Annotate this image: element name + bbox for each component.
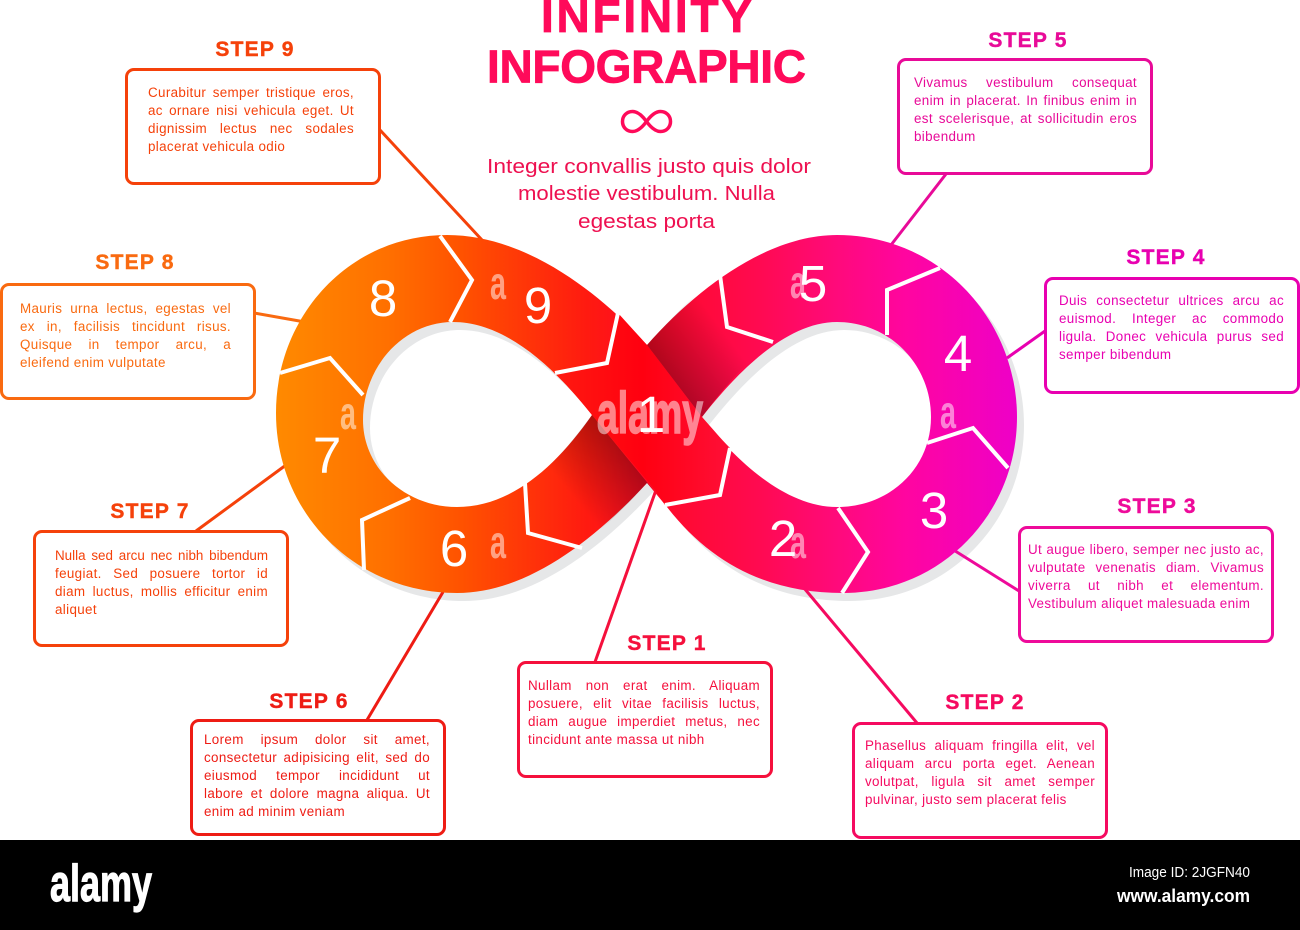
panel: step 5: Vivamus vestibulum consequat <box>914 75 1137 90</box>
subtitle: egestas porta <box>578 211 716 233</box>
panel: step 5: est scelerisque, at sollicitudin eros <box>914 111 1137 126</box>
step numbers: 5 <box>799 255 827 312</box>
panel: step 9 <box>125 38 381 185</box>
step numbers <box>313 255 972 577</box>
panel: step 1: posuere, elit vitae facilisis luctus, <box>528 696 760 711</box>
panel: step 8: Mauris urna lectus, egestas vel <box>20 301 231 316</box>
panel: step 7: diam luctus, mollis efficitur enim <box>55 584 268 599</box>
panel: step 2: Phasellus aliquam fringilla elit, vel <box>865 738 1095 753</box>
subtitle <box>487 156 811 233</box>
watermark marks: a <box>940 386 956 438</box>
footer branding: alamy <box>50 855 152 913</box>
panel: step 6: STEP 6 <box>269 690 349 713</box>
step numbers: 9 <box>524 277 552 334</box>
panel: step 3: Vestibulum aliquet malesuada enim <box>1028 596 1250 611</box>
panel: step 5: STEP 5 <box>988 29 1068 52</box>
panel: step 2: pulvinar, justo sem placerat felis <box>865 792 1067 807</box>
panel: step 3 <box>1018 495 1274 643</box>
panel: step 3: viverra ut nibh et elementum. <box>1028 578 1264 593</box>
panel: step 1 <box>517 632 773 778</box>
panel: step 4: Duis consectetur ultrices arcu ac <box>1059 293 1284 308</box>
panel: step 3: Ut augue libero, semper nec justo ac, <box>1028 542 1264 557</box>
panel: step 3: vulputate venenatis diam. Vivamus <box>1028 560 1264 575</box>
panel: step 7 <box>33 500 289 647</box>
connectors <box>196 130 1045 723</box>
footer bar <box>0 840 1300 930</box>
step numbers: 1 <box>637 386 665 443</box>
panel: step 1: Nullam non erat enim. Aliquam <box>528 678 760 693</box>
watermark marks <box>340 256 956 568</box>
panel: step 2: aliquam arcu porta eget. Aenean <box>865 756 1095 771</box>
panel: step 5 <box>897 29 1153 175</box>
panel: step 4: ligula. Donec vehicula purus sed <box>1059 329 1284 344</box>
watermark marks: alamy <box>597 381 703 446</box>
panel: step 4: euismod. Integer ac commodo <box>1059 311 1284 326</box>
infinity ribbon <box>276 235 1017 593</box>
title <box>487 0 806 92</box>
footer branding: Image ID: 2JGFN40 <box>1129 864 1250 881</box>
panel: step 9: placerat vehicula odio <box>148 139 285 154</box>
panel: step 4: STEP 4 <box>1126 246 1206 269</box>
infinity shadow <box>283 243 1024 601</box>
watermark marks: a <box>490 516 506 568</box>
panel: step 4: semper bibendum <box>1059 347 1171 362</box>
step numbers: 7 <box>313 427 341 484</box>
icon: infinity symbol <box>622 112 670 132</box>
watermark marks: a <box>490 257 506 309</box>
panel: step 6: eiusmod tempor incididunt ut <box>204 768 430 783</box>
subtitle: Integer convallis justo quis dolor <box>487 156 811 178</box>
panel: step 5: bibendum <box>914 129 976 144</box>
step numbers: 4 <box>944 325 972 382</box>
panel: step 9: dignissim lectus nec sodales <box>148 121 354 136</box>
panel: step 3: STEP 3 <box>1117 495 1197 518</box>
panel: step 7: aliquet <box>55 602 97 617</box>
panel: step 8: STEP 8 <box>95 251 175 274</box>
title: INFOGRAPHIC <box>487 40 806 92</box>
footer branding: www.alamy.com <box>1116 886 1250 906</box>
step numbers: 6 <box>440 520 468 577</box>
panel: step 2 <box>852 691 1108 839</box>
panel: step 6: labore et dolore magna aliqua. Ut <box>204 786 430 801</box>
panel: step 1: tincidunt ante massa ut nibh <box>528 732 705 747</box>
panel: step 2: STEP 2 <box>945 691 1025 714</box>
watermark marks: a <box>790 516 806 568</box>
panel: step 7: Nulla sed arcu nec nibh bibendum <box>55 548 268 563</box>
panel: step 7: STEP 7 <box>110 500 190 523</box>
panel: step 8 <box>0 251 256 400</box>
panel: step 5: enim in placerat. In finibus enim in <box>914 93 1137 108</box>
step numbers: 8 <box>369 270 397 327</box>
panel: step 7: feugiat. Sed posuere tortor id <box>55 566 268 581</box>
panel: step 1: diam augue imperdiet metus, nec <box>528 714 760 729</box>
panel: step 4 <box>1044 246 1300 394</box>
under-band shading <box>525 275 773 545</box>
panel: step 2: volutpat, ligula sit amet semper <box>865 774 1095 789</box>
segment separators <box>280 236 1008 593</box>
panel: step 6: Lorem ipsum dolor sit amet, <box>204 732 430 747</box>
panel: step 6 <box>190 690 446 836</box>
step numbers: 3 <box>920 482 948 539</box>
footer branding <box>50 855 1250 913</box>
panel: step 9: ac ornare nisi vehicula eget. Ut <box>148 103 354 118</box>
subtitle: molestie vestibulum. Nulla <box>518 183 776 205</box>
panel: step 8: Quisque in tempor arcu, a <box>20 337 231 352</box>
watermark marks: a <box>790 256 806 308</box>
panel: step 9: Curabitur semper tristique eros, <box>148 85 354 100</box>
panel: step 9: STEP 9 <box>215 38 295 61</box>
panel: step 1: STEP 1 <box>627 632 707 655</box>
step numbers: 2 <box>769 510 797 567</box>
watermark marks: a <box>340 387 356 439</box>
panel: step 8: eleifend enim vulputate <box>20 355 166 370</box>
panel: step 6: consectetur adipisicing elit, sed do <box>204 750 430 765</box>
panel: step 6: enim ad minim veniam <box>204 804 345 819</box>
segment 1 ribbon <box>555 313 730 505</box>
panel: step 8: ex in, facilisis tincidunt risus. <box>20 319 231 334</box>
